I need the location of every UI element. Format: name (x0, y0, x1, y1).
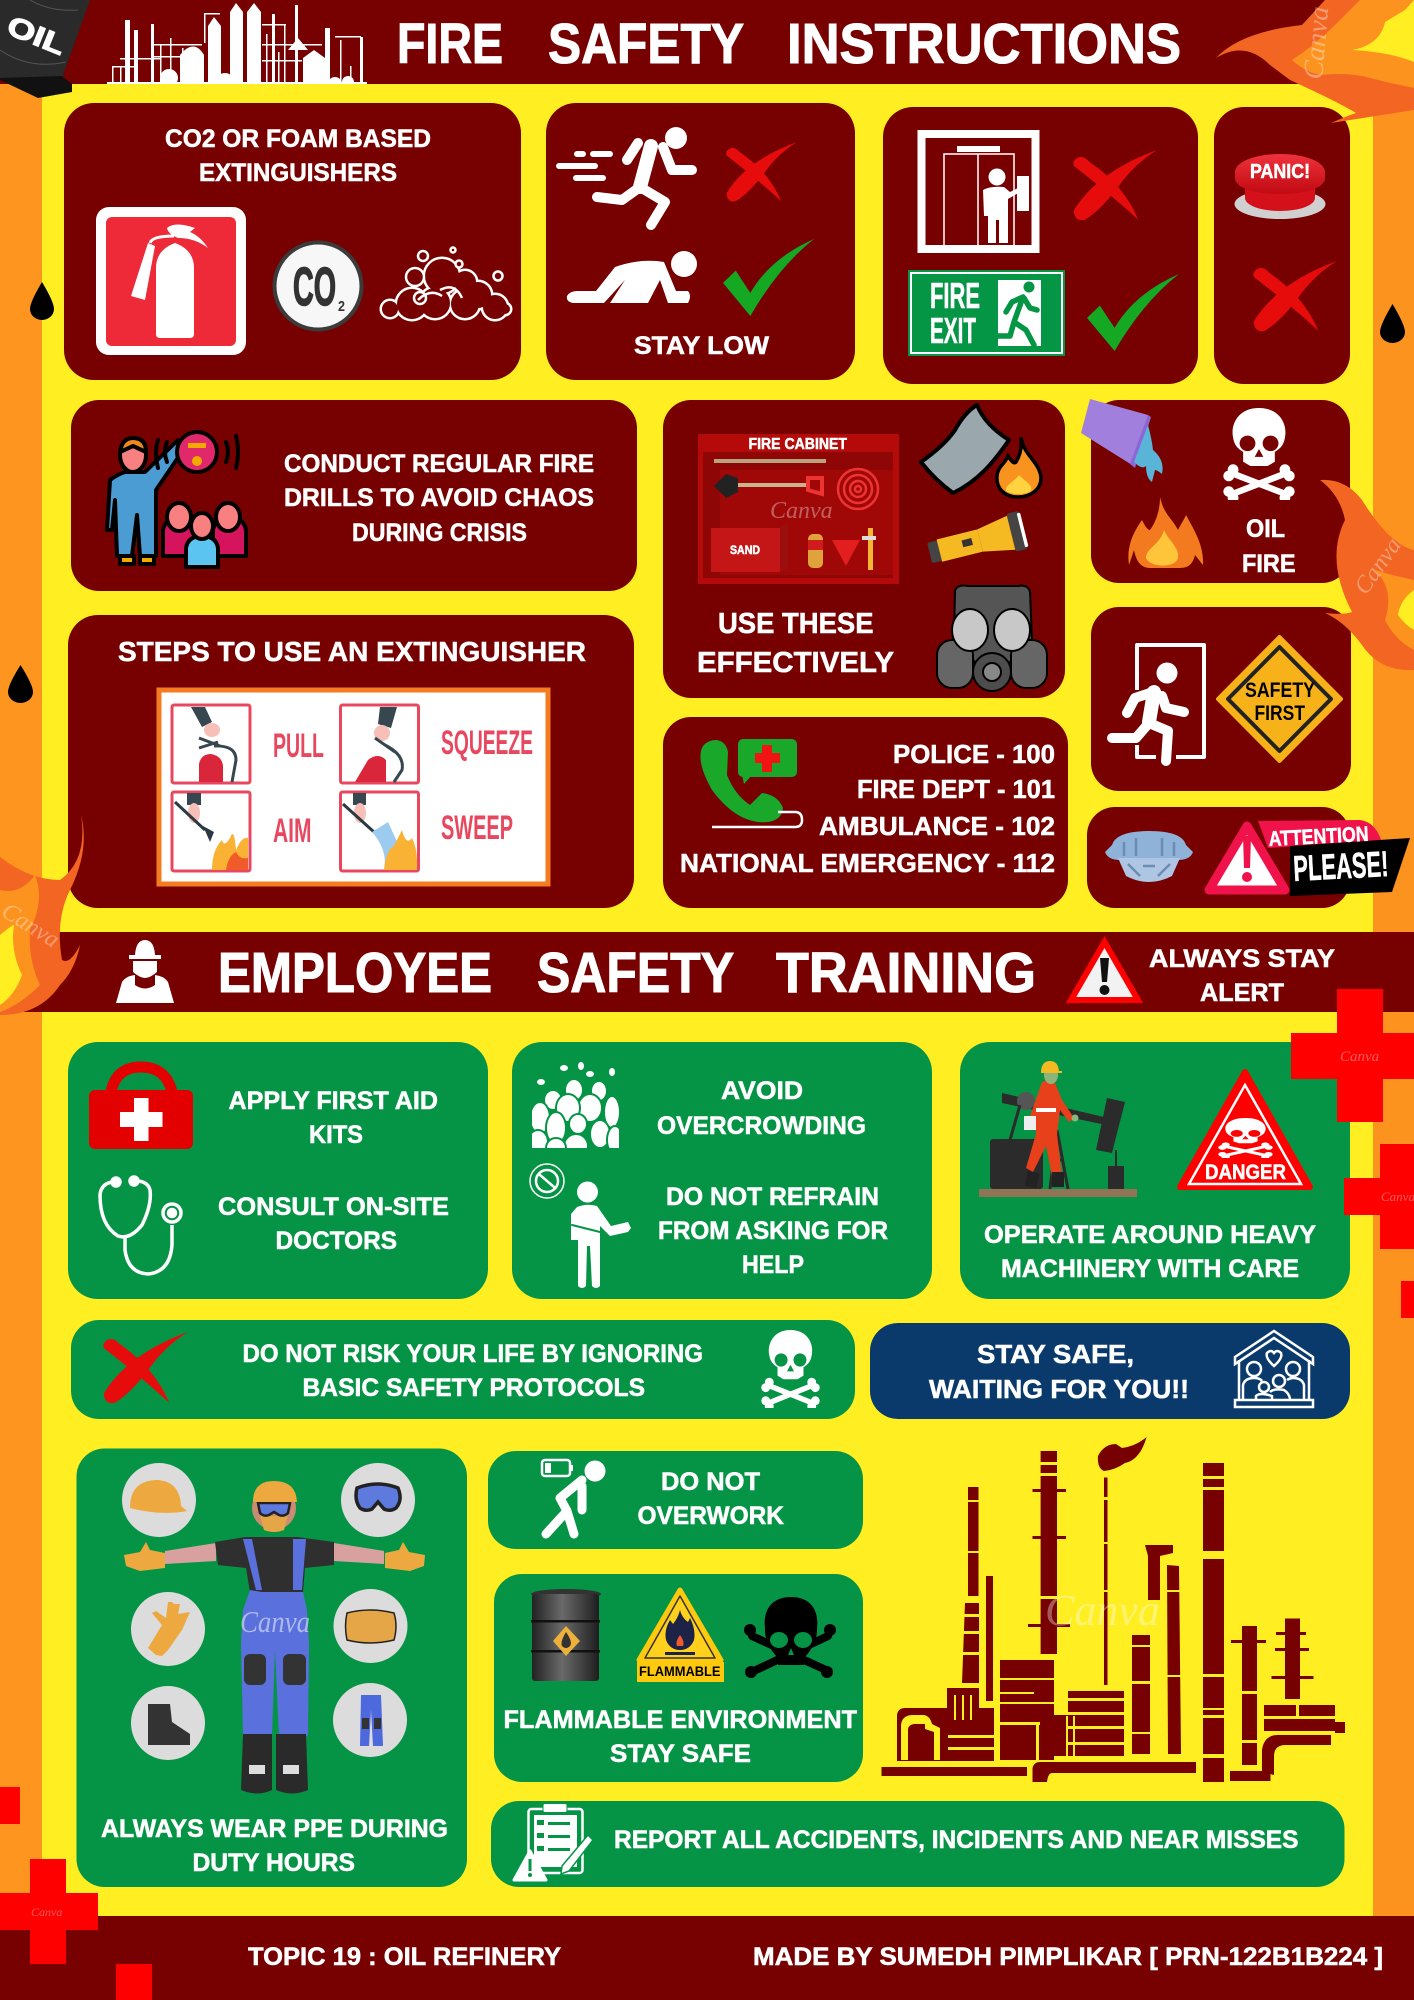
icon: safety first sign: FIRST (1254, 702, 1305, 725)
list: emergency numbers: NATIONAL EMERGENCY - 112 (680, 848, 1055, 878)
footer band (0, 1916, 1414, 2000)
icon: smoke detector (1105, 831, 1193, 882)
step: aim: AIM (273, 812, 312, 850)
icon: white refinery skyline (107, 3, 367, 91)
icon: trousers (333, 1683, 407, 1757)
list: emergency numbers: POLICE - 100 (893, 739, 1055, 769)
icon: skull and crossbones (1227, 408, 1291, 500)
icon: family house (1235, 1331, 1313, 1407)
text: always wear ppe (101, 1815, 448, 1877)
icon: red cross bottom left (0, 1859, 98, 1964)
icon: panic button (1234, 154, 1326, 219)
text: do not risk your life (242, 1340, 703, 1402)
panel: oil fire warning (1081, 399, 1350, 583)
title: fire safety instructions: SAFETY (548, 12, 744, 76)
panel: heavy machinery (960, 1042, 1350, 1299)
label: oil fire: FIRE (1242, 550, 1296, 578)
section band: employee safety training (0, 932, 1414, 1012)
text: do not refrain from asking for help: DO NOT REFRAIN (666, 1183, 879, 1211)
text: report all accidents: REPORT ALL ACCIDENTS, INCIDENTS AND NEAR MISSES (614, 1826, 1298, 1854)
icon: danger triangle: DANGER (1205, 1161, 1286, 1184)
text: avoid overcrowding (657, 1077, 866, 1140)
icon: stethoscope (100, 1177, 181, 1274)
text: do not risk your life: DO NOT RISK YOUR LIFE BY IGNORING (242, 1340, 703, 1368)
text: apply first aid kits: APPLY FIRST AID (228, 1087, 438, 1115)
text: operate around heavy machinery: MACHINERY WITH CARE (1001, 1255, 1299, 1283)
text: consult on-site doctors (218, 1193, 449, 1255)
icon: attention please sign (1209, 820, 1410, 896)
panel: ppe (76, 1448, 467, 1887)
icon: foam (382, 248, 510, 319)
icon: red cross (726, 142, 797, 201)
icon: flame left (0, 815, 84, 1015)
step: pull (172, 705, 324, 783)
icon: crawling figure (567, 251, 697, 303)
text: conduct regular fire drills (284, 450, 594, 547)
text: operate around heavy machinery: OPERATE AROUND HEAVY (984, 1221, 1316, 1249)
icon: red cross right upper: Canva (1340, 1049, 1379, 1065)
title: fire safety instructions: INSTRUCTIONS (787, 12, 1181, 76)
text: stay safe: WAITING FOR YOU!! (929, 1374, 1189, 1404)
icon: gas mask (937, 586, 1047, 691)
icon: pumpjack with worker (979, 1061, 1137, 1197)
panel: extinguisher types (64, 103, 521, 380)
icon: instructor with alarm and group (107, 432, 246, 567)
text: flammable environment: STAY SAFE (610, 1740, 751, 1768)
text: do not overwork: DO NOT (661, 1468, 760, 1496)
icon: checklist with warning (514, 1804, 593, 1880)
text: author credit: MADE BY SUMEDH PIMPLIKAR [ PRN-122B1B224 ] (753, 1943, 1383, 1971)
icon: gloves (131, 1592, 205, 1666)
icon: worker (116, 940, 174, 1003)
panel: use exit not elevator (883, 107, 1198, 384)
text: conduct regular fire drills: DURING CRISIS (352, 519, 527, 547)
icon: fire exit sign: EXIT (930, 310, 976, 351)
title: employee safety training: EMPLOYEE (218, 941, 492, 1005)
icon: green check (1087, 274, 1179, 351)
text: use these effectively (697, 608, 894, 679)
icon: warning triangle (1071, 942, 1138, 1000)
icon: helmet (122, 1463, 196, 1537)
title: fire safety instructions: FIRE (397, 12, 503, 76)
image: fire cabinet: SAND (730, 543, 760, 557)
text: stay safe: STAY SAFE, (977, 1339, 1134, 1369)
text: do not risk your life: BASIC SAFETY PROTOCOLS (302, 1374, 645, 1402)
panel: emergency numbers (663, 717, 1068, 908)
icon: co2 badge (274, 242, 362, 330)
icon: danger triangle (1180, 1072, 1310, 1187)
icon: red cross right lower (1344, 1144, 1414, 1249)
icon: safety first sign (1218, 637, 1341, 761)
panel: do not overwork (488, 1451, 863, 1549)
icon: person hesitant to ask for help (530, 1164, 631, 1288)
text: use these effectively: USE THESE (718, 608, 874, 640)
text: conduct regular fire drills: DRILLS TO AVOID CHAOS (284, 484, 594, 512)
panel: fire cabinet equipment (663, 400, 1065, 698)
title: employee safety training: TRAINING (776, 941, 1036, 1005)
icon: flashlight (925, 511, 1029, 572)
image: fire cabinet (698, 434, 899, 584)
step: squeeze (340, 705, 533, 783)
image: fire cabinet: FIRE CABINET (748, 436, 847, 453)
icon: person leaving through door (1112, 645, 1204, 761)
text: always wear ppe: ALWAYS WEAR PPE DURING (101, 1815, 448, 1843)
icon: oil drop left lower (8, 665, 33, 703)
icon: co2 badge: CO (293, 257, 336, 317)
illustration: maroon refinery (882, 1437, 1345, 1782)
image: fire cabinet: Canva (770, 498, 833, 524)
icon: attention please sign: ATTENTION (1268, 823, 1369, 851)
text: avoid overcrowding: OVERCROWDING (657, 1112, 866, 1140)
text: do not overwork (638, 1468, 784, 1530)
text: operate around heavy machinery (984, 1221, 1316, 1283)
icon: running figure (559, 127, 692, 225)
icon: red cross right upper (1291, 989, 1414, 1122)
panel: alarm and attention (1087, 807, 1410, 908)
title: fire safety instructions (397, 12, 1181, 76)
icon: fire exit sign (908, 270, 1065, 356)
icon: goggles (341, 1463, 415, 1537)
header band (0, 0, 1325, 84)
icon: first aid kit (89, 1067, 193, 1149)
icon: fire exit sign: FIRE (930, 275, 980, 316)
icon: crowd (532, 1062, 619, 1148)
heading: co2 or foam (165, 125, 431, 187)
icon: emergency phone (700, 739, 802, 827)
label: oil fire (1242, 515, 1296, 578)
text: do not refrain from asking for help: FROM ASKING FOR (658, 1217, 888, 1245)
icon: red square right (1401, 1281, 1414, 1318)
icon: flame (1128, 497, 1203, 568)
text: conduct regular fire drills: CONDUCT REGULAR FIRE (284, 450, 594, 478)
icon: flame right: Canva (1350, 533, 1407, 599)
list: emergency numbers: FIRE DEPT - 101 (857, 774, 1055, 804)
heading: co2 or foam: EXTINGUISHERS (199, 159, 397, 187)
icon: tired person with low battery (542, 1460, 606, 1534)
panel: fire drills (71, 400, 637, 591)
heading: steps: STEPS TO USE AN EXTINGUISHER (118, 636, 586, 667)
icon: flammable sign: FLAMMABLE (639, 1663, 720, 1679)
text: do not refrain from asking for help (658, 1183, 888, 1279)
text: do not refrain from asking for help: HELP (742, 1251, 804, 1279)
icon: oil barrel (0, 0, 90, 98)
text: consult on-site doctors: DOCTORS (276, 1227, 397, 1255)
text: stay safe (929, 1339, 1189, 1404)
icon: extinguisher sign (96, 207, 246, 355)
icon: red cross right lower: Canva (1381, 1189, 1414, 1204)
panel: stay low (546, 103, 855, 380)
icon: panic button: PANIC! (1250, 161, 1310, 183)
chart: pass steps card (159, 690, 548, 884)
icon: oil barrel: OIL (3, 10, 70, 61)
illustration: worker in ppe (124, 1481, 425, 1794)
text: flammable environment: FLAMMABLE ENVIRONMENT (504, 1706, 857, 1734)
step: pull: PULL (273, 727, 324, 765)
icon: spilled bucket (1081, 399, 1163, 482)
panel: steps to use an extinguisher (68, 615, 634, 908)
panel: do not risk your life (71, 1320, 855, 1419)
text: always stay alert: ALWAYS STAY (1149, 945, 1335, 973)
title: employee safety training (218, 941, 1036, 1005)
text: do not overwork: OVERWORK (638, 1502, 784, 1530)
icon: boot (131, 1686, 205, 1760)
text: consult on-site doctors: CONSULT ON-SITE (218, 1193, 449, 1221)
list: emergency numbers: AMBULANCE - 102 (819, 811, 1055, 841)
icon: red cross (1073, 150, 1157, 220)
panel: do not panic (1214, 107, 1350, 384)
icon: red cross bottom partial (116, 1964, 152, 2000)
icon: green check (723, 239, 814, 316)
text: avoid overcrowding: AVOID (721, 1077, 803, 1105)
icon: oil drop left top (30, 282, 54, 320)
icon: red square left (0, 1787, 20, 1824)
icon: safety first sign: SAFETY (1245, 679, 1315, 702)
icon: fire blanket and flame (921, 405, 1041, 497)
icon: red cross (1253, 261, 1337, 331)
panel: exit and safety first (1091, 607, 1351, 791)
icon: co2 badge: 2 (338, 298, 345, 315)
text: flammable environment (504, 1706, 857, 1768)
icon: red cross bottom left: Canva (31, 1905, 62, 1919)
icon: oil drum (531, 1589, 601, 1681)
illustration: maroon refinery: Canva (1045, 1586, 1160, 1635)
icon: black skull (744, 1597, 836, 1678)
step: squeeze: SQUEEZE (441, 724, 533, 762)
icon: flame top right (1216, 0, 1414, 123)
icon: flame top right: Canva (1298, 5, 1335, 81)
text: apply first aid kits: KITS (309, 1121, 363, 1149)
icon: flame right (1320, 480, 1414, 670)
text: use these effectively: EFFECTIVELY (697, 647, 894, 679)
step: aim (172, 792, 312, 871)
icon: red cross (103, 1332, 188, 1403)
text: topic: TOPIC 19 : OIL REFINERY (248, 1943, 561, 1971)
icon: flammable sign (637, 1590, 724, 1682)
list: emergency numbers (680, 739, 1055, 878)
icon: face mask (334, 1589, 408, 1663)
panel: first aid and doctors (68, 1042, 488, 1299)
panel: stay safe waiting for you (870, 1323, 1350, 1419)
text: always stay alert: ALERT (1200, 979, 1284, 1007)
text: always stay alert (1149, 945, 1335, 1007)
icon: elevator (922, 134, 1036, 249)
heading: co2 or foam: CO2 OR FOAM BASED (165, 125, 431, 153)
illustration: worker in ppe: Canva (240, 1604, 310, 1639)
panel: report accidents (491, 1801, 1344, 1887)
label: stay low: STAY LOW (634, 332, 769, 360)
text: apply first aid kits (228, 1087, 438, 1149)
panel: flammable environment (494, 1574, 863, 1782)
icon: skull and crossbones (764, 1330, 817, 1408)
title: employee safety training: SAFETY (537, 941, 734, 1005)
panel: overcrowding and asking for help (512, 1042, 932, 1299)
step: sweep: SWEEP (441, 809, 513, 847)
icon: oil drop right (1380, 304, 1405, 343)
label: oil fire: OIL (1246, 515, 1285, 543)
text: always wear ppe: DUTY HOURS (192, 1849, 355, 1877)
step: sweep (340, 792, 513, 871)
